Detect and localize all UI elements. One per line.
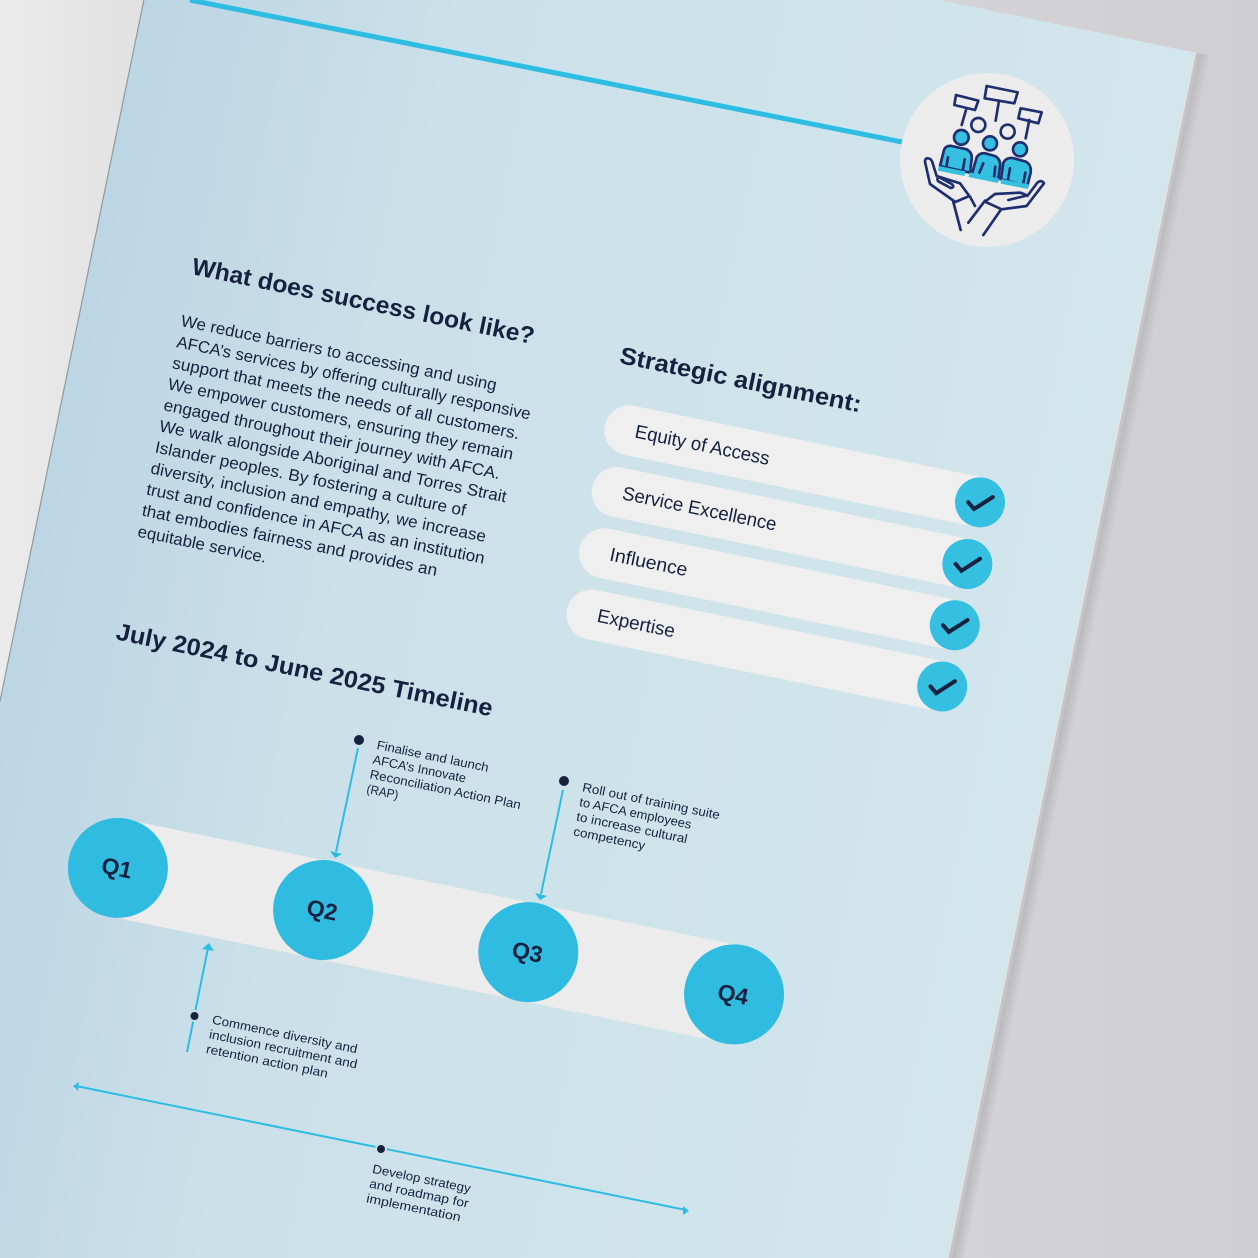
heading: strategic alignment: Strategic alignment:	[617, 342, 864, 418]
arrow: recruitment to Q1	[187, 943, 214, 1052]
text block: success description: that embodies fairness and provides an	[140, 502, 439, 580]
callout text: Q2 RAP: Reconciliation Action Plan	[368, 767, 522, 812]
item: Influence	[575, 524, 984, 655]
callout text: strategy: and roadmap for	[368, 1177, 470, 1211]
callout text: Q1 recruitment: retention action plan	[205, 1042, 329, 1081]
marker: Q3: Q3	[510, 936, 545, 968]
marker: Q2: Q2	[304, 894, 340, 926]
text block: success description: equitable service.	[136, 523, 268, 567]
marker: Q2	[264, 851, 382, 969]
text block: success description: trust and confidence in AFCA as an institution	[145, 481, 486, 568]
callout text: strategy: implementation	[365, 1191, 462, 1224]
callout text: Q2 RAP	[365, 738, 528, 827]
callout text: strategy	[365, 1162, 473, 1225]
marker: Q1	[59, 809, 177, 927]
heading: success: What does success look like?	[190, 253, 537, 350]
callout text: Q1 recruitment: Commence diversity and	[211, 1013, 359, 1056]
callout text: Q2 RAP: (RAP)	[365, 782, 400, 802]
text block: success description: diversity, inclusion and empathy, we increase	[149, 460, 488, 546]
item: Expertise: Expertise	[595, 606, 677, 642]
arrow: training to Q3	[535, 776, 569, 900]
marker: Q3	[469, 893, 587, 1011]
item: Equity of Access: Equity of Access	[633, 422, 771, 470]
callout text: Q3 training: to increase cultural	[575, 810, 689, 846]
item: Influence: Influence	[608, 545, 689, 581]
heading: timeline: July 2024 to June 2025 Timeline	[114, 619, 495, 722]
text block: success description	[136, 312, 537, 613]
arrow: full year strategy span	[73, 1082, 689, 1215]
arrow: RAP to Q2	[330, 735, 364, 858]
callout text: Q3 training: Roll out of training suite	[581, 780, 721, 822]
marker: Q4: Q4	[715, 978, 751, 1010]
chart: quarterly timeline band	[59, 809, 793, 1053]
callout text: Q3 training	[572, 780, 721, 866]
text block: success description: We reduce barriers to accessing and using	[179, 312, 498, 395]
callout text: Q1 recruitment	[205, 1013, 362, 1086]
item: Equity of Access	[600, 401, 1010, 532]
text block: success description: support that meets the needs of all customers.	[171, 354, 521, 443]
callout text: Q2 RAP: Finalise and launch	[375, 738, 490, 775]
marker: Q1: Q1	[99, 852, 135, 884]
callout text: strategy: Develop strategy	[371, 1162, 473, 1196]
callout text: Q2 RAP: AFCA’s Innovate	[371, 753, 467, 785]
item: Expertise	[562, 585, 972, 716]
text block: success description: Islander peoples. By fostering a culture of	[153, 439, 468, 520]
callout text: Q3 training: competency	[572, 824, 647, 853]
top accent line	[190, 0, 902, 142]
item: Service Excellence: Service Excellence	[620, 483, 778, 536]
text block: success description: engaged throughout their journey with AFCA.	[162, 396, 502, 483]
text block: success description: We walk alongside Aboriginal and Torres Strait	[158, 417, 509, 506]
marker: Q4	[675, 935, 793, 1053]
callout text: Q3 training: to AFCA employees	[578, 795, 693, 832]
item: Service Excellence	[587, 463, 997, 594]
text block: success description: We empower customers, ensuring they remain	[166, 375, 515, 464]
text block: success description: AFCA’s services by offering culturally responsive	[175, 333, 532, 423]
callout text: Q1 recruitment: inclusion recruitment and	[208, 1027, 359, 1071]
icon: community in hands badge	[900, 73, 1074, 247]
panel: strategic alignment checklist	[562, 401, 1010, 716]
